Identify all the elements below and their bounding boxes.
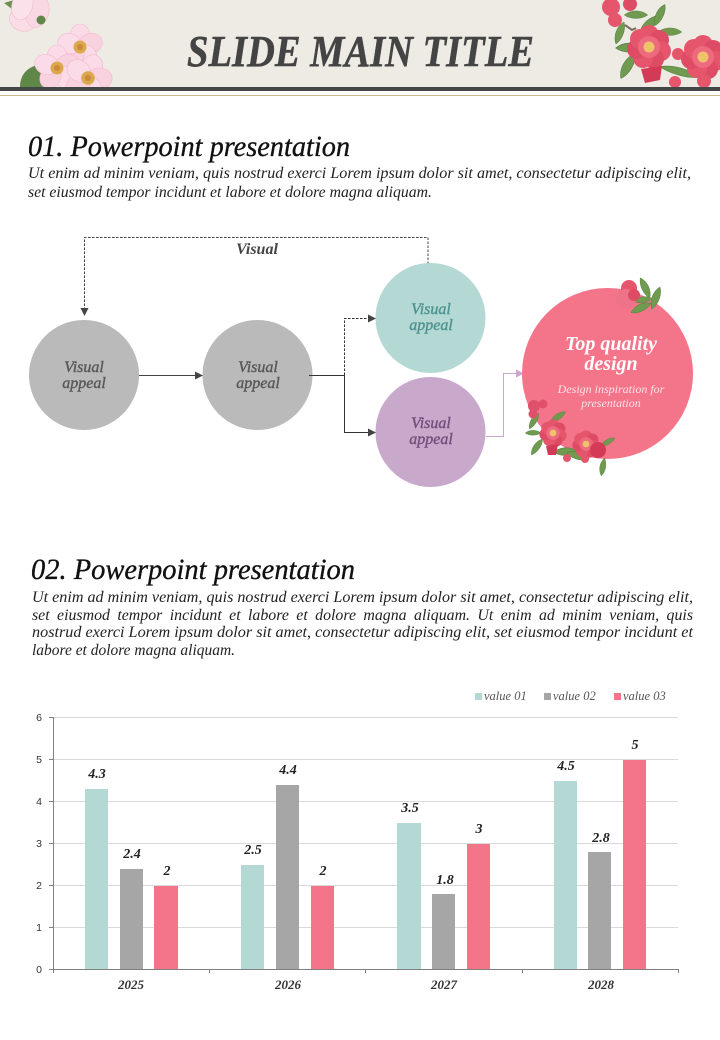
y axis labels: 0 (36, 964, 42, 976)
arrow: step 2 to branch top (344, 318, 375, 375)
circle: purple: appeal (409, 431, 453, 448)
text block: section 02: labore et dolore magna aliquam. (32, 642, 235, 659)
group: 2028 (554, 738, 646, 992)
circle: step 2 (202, 320, 312, 430)
label: Visual: Visual (236, 241, 278, 258)
circle: purple: Visual (411, 415, 451, 432)
header band (0, 0, 720, 87)
group: 2025 (85, 767, 178, 992)
arrow: step 1 to 2 (139, 374, 202, 376)
y axis labels: 5 (36, 754, 42, 766)
circle: step 2: Visual (238, 359, 278, 376)
group: 2027 (397, 801, 490, 992)
icon: flowers bottom left (525, 400, 616, 476)
group: 2026: 2 (318, 864, 326, 879)
group: 2026: 2026 (274, 977, 302, 992)
circle: purple (376, 377, 486, 487)
group: 2025: 2 (162, 864, 170, 879)
group: 2027: 2027 (430, 977, 458, 992)
group: 2027: 1.8 (436, 873, 454, 888)
arrow: step 2 to branch bottom (309, 376, 375, 432)
group: 2026 (241, 763, 334, 992)
circle: step 1: Visual (64, 359, 104, 376)
y axis labels: 1 (36, 922, 42, 934)
title: SLIDE MAIN TITLE (187, 27, 534, 76)
group: 2025: 2025 (117, 977, 144, 992)
text block: section 02 (32, 589, 694, 659)
circle: teal: Visual (411, 301, 451, 318)
legend: value 03 (623, 689, 666, 703)
circle: teal: appeal (409, 317, 453, 334)
text block: section 01: Ut enim ad minim veniam, quis nostrud exerci Lorem ipsum dolor sit amet, consectetur adipiscing elit, (28, 165, 691, 182)
circle: step 2: appeal (236, 375, 280, 392)
heading: section 02: 02. Powerpoint presentation (31, 553, 355, 586)
group: 2025: 4.3 (87, 767, 106, 782)
circle: top quality design: Top quality (565, 333, 657, 355)
y axis labels: 4 (36, 796, 42, 808)
circle: top quality design: presentation (580, 396, 641, 410)
circle: top quality design: Design inspiration for (557, 382, 665, 396)
bar chart (36, 712, 678, 992)
header rules (0, 87, 720, 96)
circle: step 1 (29, 320, 139, 430)
legend (475, 689, 666, 703)
icon: red blossoms (602, 0, 720, 88)
group: 2028: 4.5 (556, 759, 575, 774)
legend: value 02 (553, 689, 596, 703)
legend: value 01 (484, 689, 527, 703)
group: 2027: 3.5 (400, 801, 419, 816)
group: 2027: 3 (474, 822, 482, 837)
y axis labels: 3 (36, 838, 42, 850)
flow diagram (29, 238, 693, 487)
text block: section 02: Ut enim ad minim veniam, quis nostrud exerci Lorem ipsum dolor sit amet, consectetur adipiscing elit, (32, 589, 693, 606)
heading: section 01: 01. Powerpoint presentation (28, 130, 350, 163)
arrow: purple to pink (486, 374, 523, 436)
circle: teal (376, 263, 486, 373)
circle: top quality design: design (584, 353, 638, 375)
y axis labels (36, 712, 42, 976)
text block: section 02: nostrud exerci Lorem ipsum dolor sit amet, consectetur adipiscing elit, set eiusmod tempor incidunt et (32, 624, 694, 641)
text block: section 01 (28, 165, 691, 201)
icon: flowers top right (616, 276, 663, 316)
circle: step 1: appeal (62, 375, 106, 392)
group: 2028: 5 (632, 738, 638, 753)
icon: pink blossoms (4, 0, 112, 87)
circle: top quality design (522, 288, 693, 459)
group: 2026: 4.4 (278, 763, 297, 778)
group: 2026: 2.5 (243, 843, 262, 858)
y axis labels: 2 (36, 880, 42, 892)
group: 2025: 2.4 (122, 847, 141, 862)
group: 2028: 2.8 (591, 831, 610, 846)
y axis labels: 6 (36, 712, 42, 724)
text block: section 02: set eiusmod tempor incidunt et labore et dolore magna aliquam. Ut enim ad minim veniam, quis (32, 607, 693, 624)
arrow: feedback loop (84, 238, 428, 315)
text block: section 01: set eiusmod tempor incidunt et labore et dolore magna aliquam. (28, 184, 432, 201)
group: 2028: 2028 (587, 977, 614, 992)
